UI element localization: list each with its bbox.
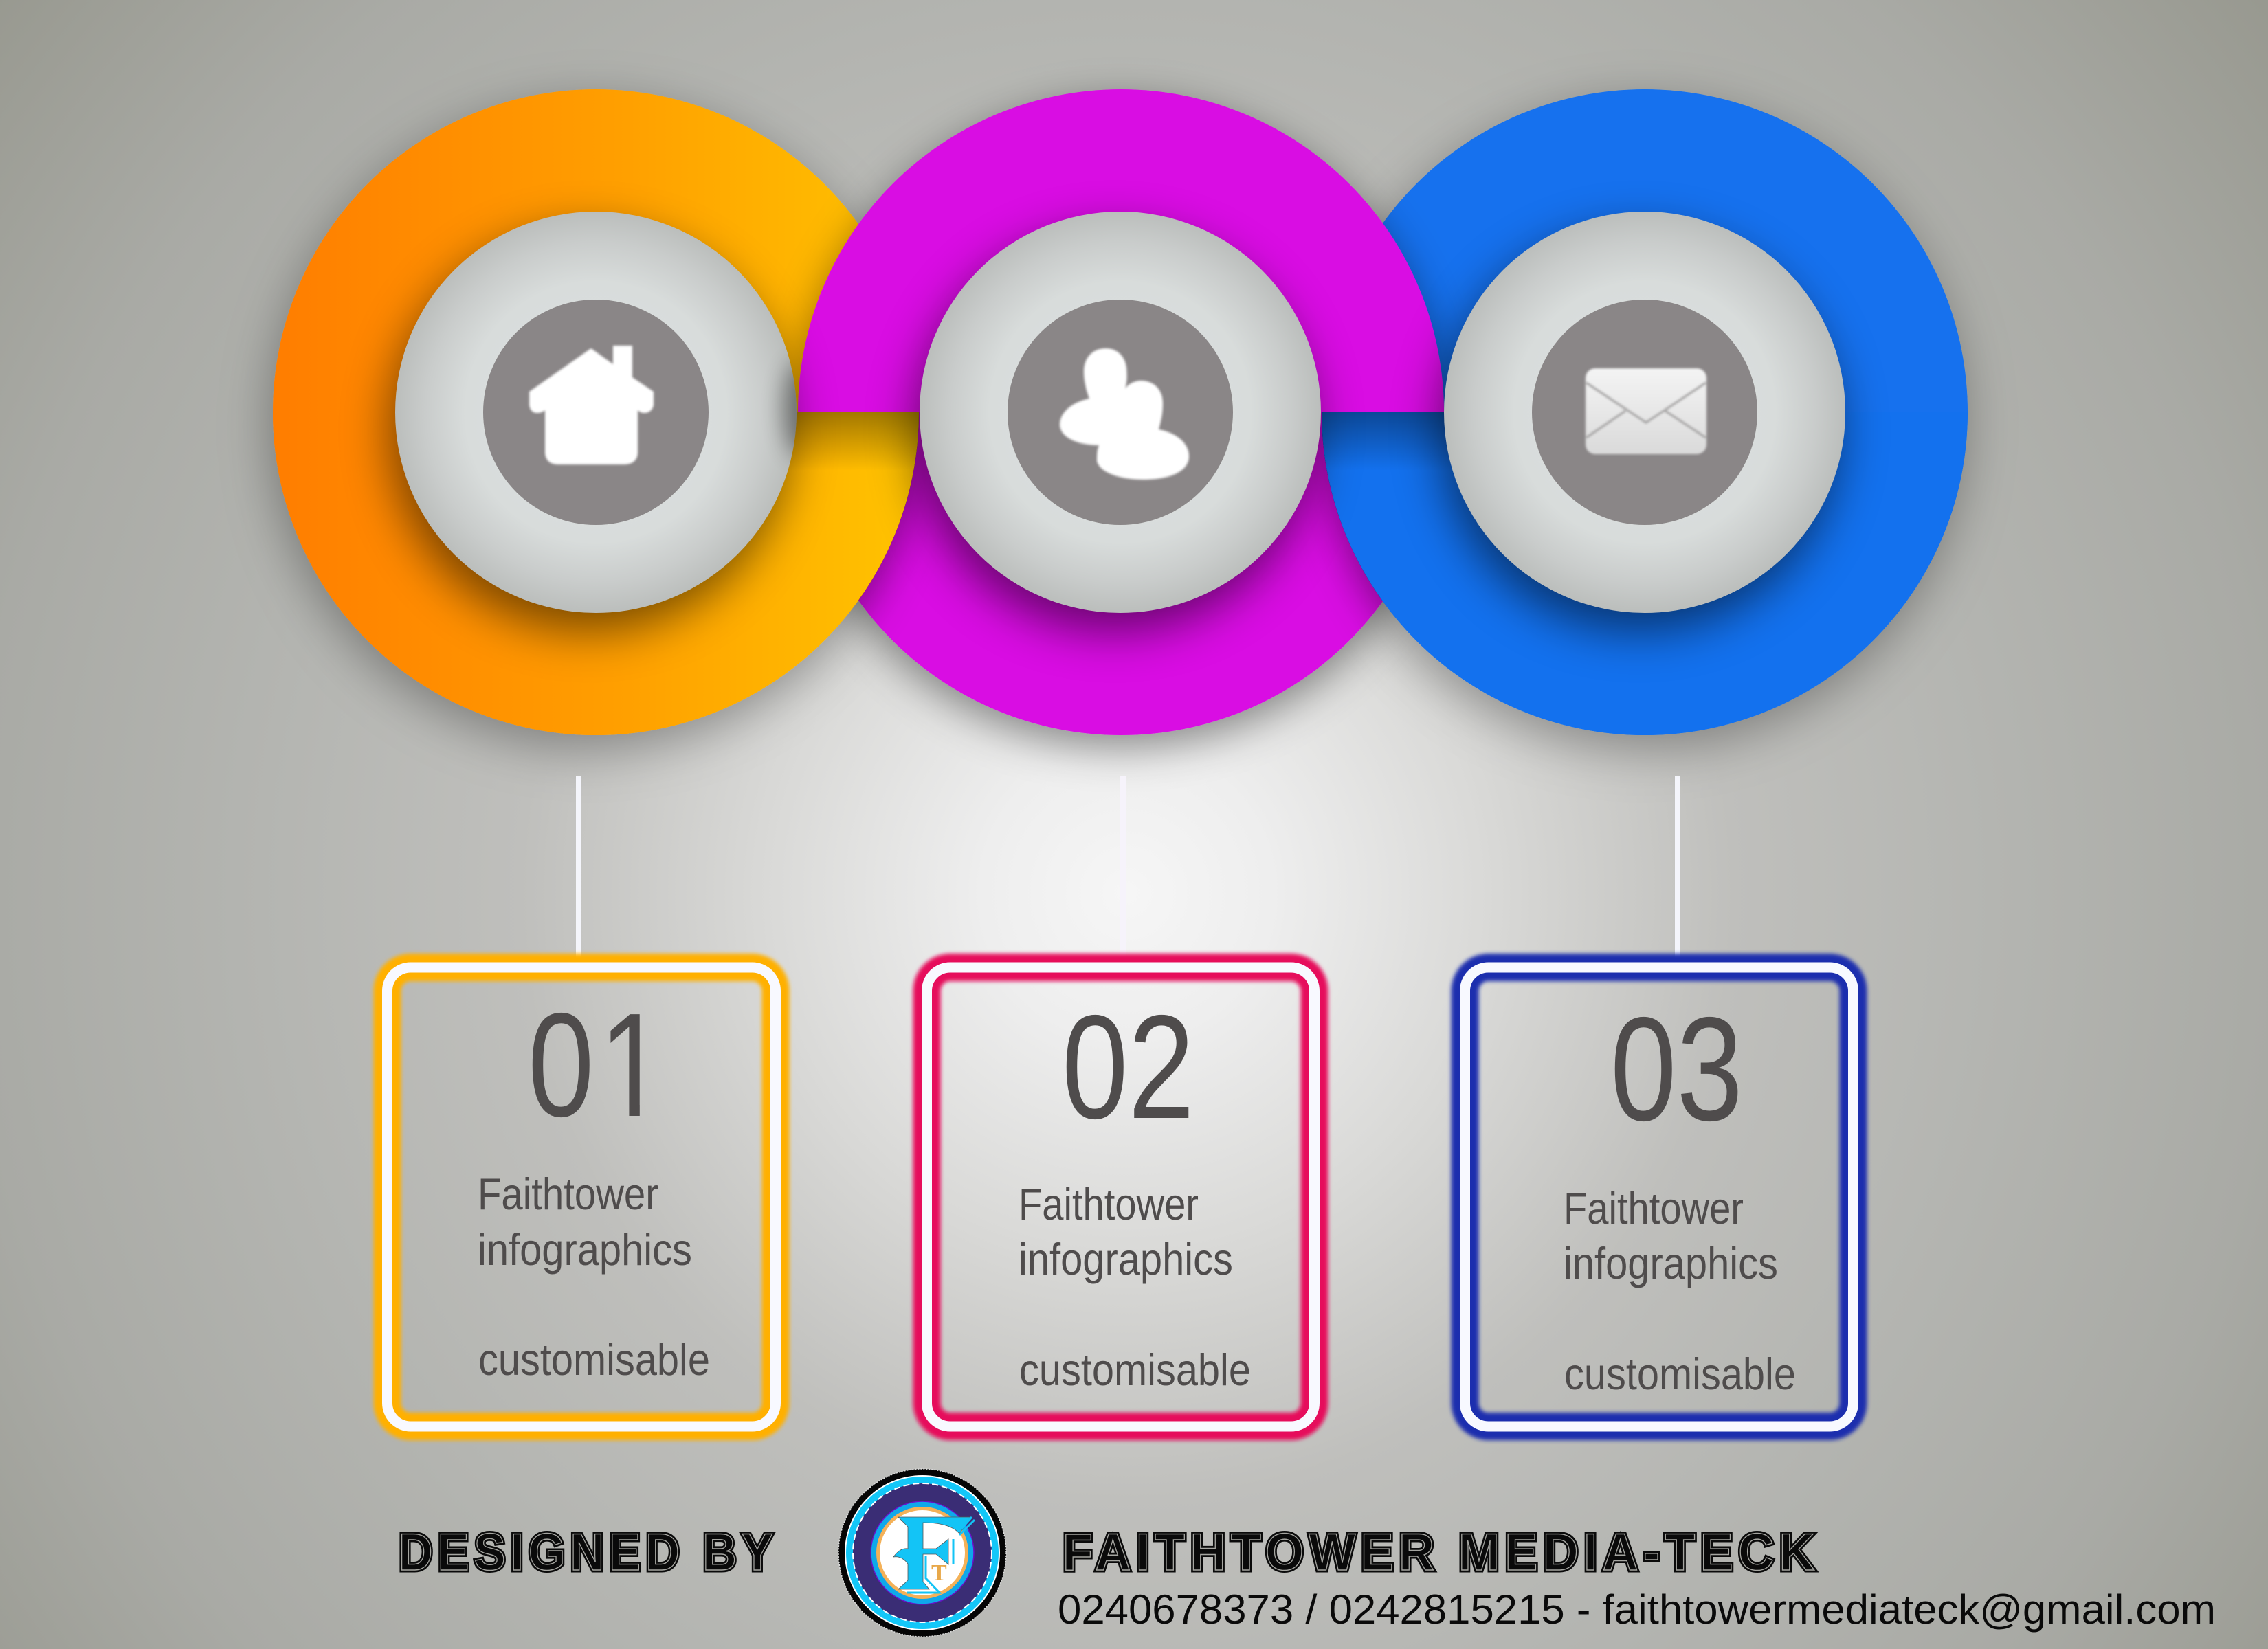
icon disc bbox=[483, 300, 709, 525]
icon disc bbox=[1532, 300, 1757, 525]
hub disc bbox=[1444, 212, 1845, 613]
interlocked rings bbox=[273, 89, 1968, 735]
hub disc bbox=[395, 212, 797, 613]
hub: home bbox=[389, 212, 819, 632]
ring: orange lower overlap bbox=[273, 412, 935, 735]
hub edge shade bbox=[770, 356, 797, 463]
icon: envelope bbox=[1586, 368, 1706, 454]
text block: customisable bbox=[1564, 1349, 1796, 1399]
number: 02 bbox=[1062, 984, 1194, 1149]
hub shadow bbox=[389, 231, 790, 632]
text block: infographics bbox=[478, 1224, 692, 1275]
connector line 2 bbox=[1120, 776, 1126, 963]
contact line: 0240678373 / 0242815215 - faithtowermediateck@gmail.com bbox=[1058, 1586, 2216, 1633]
icon: house bbox=[529, 346, 654, 464]
ring: magenta bbox=[798, 89, 1444, 735]
hub disc bbox=[920, 212, 1321, 613]
designed by label: DESIGNED BY bbox=[399, 1523, 778, 1582]
text block: customisable bbox=[478, 1334, 710, 1384]
card frame bbox=[388, 967, 775, 1426]
connector line 1 bbox=[576, 776, 581, 963]
logo rings bbox=[838, 1469, 1006, 1637]
text block: customisable bbox=[1019, 1345, 1251, 1395]
text block: Faithtower bbox=[1564, 1183, 1744, 1233]
card frame bbox=[1465, 967, 1853, 1426]
card frame bbox=[926, 967, 1314, 1426]
connector line 3 bbox=[1675, 776, 1680, 963]
hub shadow bbox=[914, 231, 1315, 632]
ring: orange base bbox=[273, 89, 919, 735]
text block bbox=[1564, 1183, 1796, 1399]
card 01 bbox=[388, 967, 775, 1426]
icon: people bbox=[1060, 348, 1189, 480]
text block: Faithtower bbox=[1019, 1179, 1199, 1229]
text block: Faithtower bbox=[478, 1169, 658, 1219]
text block bbox=[1019, 1179, 1251, 1395]
company name: FAITHTOWER MEDIA-TECK bbox=[1063, 1523, 1820, 1582]
designed by label: DESIGNED BY bbox=[399, 1523, 778, 1582]
hub: mail bbox=[1438, 212, 1845, 632]
hub shadow bbox=[1438, 231, 1840, 632]
icon disc bbox=[1008, 300, 1233, 525]
logo monogram bbox=[893, 1517, 975, 1593]
ring: blue base bbox=[1322, 89, 1968, 735]
number: 01 bbox=[528, 983, 665, 1147]
text block bbox=[478, 1169, 710, 1384]
card 03 bbox=[1465, 967, 1853, 1426]
number: 03 bbox=[1610, 986, 1743, 1152]
card 02 bbox=[926, 967, 1314, 1426]
text block: infographics bbox=[1564, 1238, 1778, 1288]
company name: FAITHTOWER MEDIA-TECK bbox=[1063, 1523, 1820, 1582]
logo bbox=[838, 1469, 1006, 1637]
hub: people bbox=[914, 212, 1321, 632]
ring: blue lower overlap bbox=[1304, 412, 1968, 735]
logo monogram: T bbox=[931, 1560, 947, 1586]
text block: infographics bbox=[1019, 1234, 1233, 1284]
